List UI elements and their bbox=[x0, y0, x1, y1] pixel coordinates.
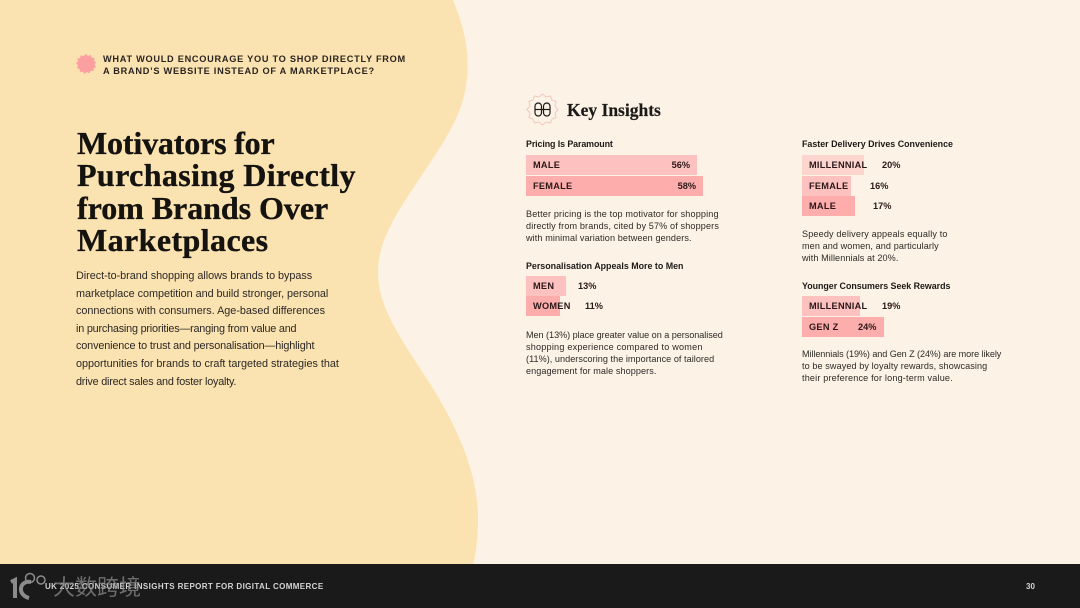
pricing text: Better pricing is the top motivator for shopping bbox=[526, 209, 719, 219]
personalisation text: (11%), underscoring the importance of tailored bbox=[526, 354, 714, 364]
intro paragraph: Direct-to-brand shopping allows brands to bypass bbox=[76, 270, 312, 282]
rewards text: their preference for long-term value. bbox=[802, 373, 953, 383]
title: Purchasing Directly bbox=[77, 157, 356, 193]
title: from Brands Over bbox=[77, 190, 328, 226]
rewards text: Millennials (19%) and Gen Z (24%) are more likely bbox=[802, 349, 1001, 359]
bar: male 56%: MALE bbox=[533, 160, 560, 170]
bar: men 13% bbox=[526, 276, 566, 296]
footer bar bbox=[0, 564, 1080, 608]
intro paragraph: convenience to trust and personalisation—highlight bbox=[76, 340, 314, 352]
bar: female 58%: 58% bbox=[678, 181, 696, 191]
intro paragraph: in purchasing priorities—ranging from value and bbox=[76, 323, 296, 335]
bar: female 16%: FEMALE bbox=[809, 181, 848, 191]
intro paragraph: connections with consumers. Age-based differences bbox=[76, 305, 325, 317]
question kicker: A BRAND’S WEBSITE INSTEAD OF A MARKETPLACE? bbox=[103, 66, 375, 76]
title bbox=[77, 125, 356, 258]
pricing text: with minimal variation between genders. bbox=[526, 233, 692, 243]
bar: male 56%: 56% bbox=[672, 160, 690, 170]
question kicker: WHAT WOULD ENCOURAGE YOU TO SHOP DIRECTLY FROM bbox=[103, 54, 406, 64]
panel: delivery: 16% bbox=[870, 181, 888, 191]
personalisation text: shopping experience compared to women bbox=[526, 342, 703, 352]
bar: millennial 19% bbox=[802, 296, 860, 316]
delivery text bbox=[802, 229, 948, 263]
intro paragraph bbox=[76, 270, 339, 388]
watermark text: 大数跨境 bbox=[53, 575, 141, 600]
bar: gen z 24%: GEN Z bbox=[809, 322, 838, 332]
title: Marketplaces bbox=[77, 222, 269, 258]
panel: pricing bbox=[526, 139, 719, 243]
title: Motivators for bbox=[77, 125, 275, 161]
rewards text bbox=[802, 349, 1002, 383]
bar: female 58% bbox=[526, 176, 703, 196]
panel: rewards: 19% bbox=[882, 301, 900, 311]
bar: male 17% bbox=[802, 196, 855, 216]
delivery text: with Millennials at 20%. bbox=[802, 253, 898, 263]
bar: female 58%: FEMALE bbox=[533, 181, 572, 191]
intro paragraph: opportunities for brands to craft targeted strategies that bbox=[76, 358, 339, 370]
watermark bbox=[10, 572, 141, 600]
watermark logo bbox=[10, 572, 46, 600]
bar: millennial 19%: MILLENNIAL bbox=[809, 301, 867, 311]
question kicker bbox=[103, 54, 406, 76]
heading: pricing is paramount: Pricing Is Paramount bbox=[526, 139, 613, 149]
heading: delivery: Faster Delivery Drives Convenience bbox=[802, 139, 953, 149]
pricing text bbox=[526, 209, 719, 243]
pricing text: directly from brands, cited by 57% of shoppers bbox=[526, 221, 719, 231]
delivery text: men and women, and particularly bbox=[802, 241, 939, 251]
bar: gen z 24%: 24% bbox=[858, 322, 876, 332]
bar: millennial 20% bbox=[802, 155, 864, 175]
rewards text: to be swayed by loyalty rewards, showcasing bbox=[802, 361, 987, 371]
bar: male 56% bbox=[526, 155, 697, 175]
bar: female 16% bbox=[802, 176, 851, 196]
panel: personalisation: 11% bbox=[585, 301, 603, 311]
personalisation text bbox=[526, 330, 723, 376]
bar: women 11%: WOMEN bbox=[533, 301, 571, 311]
heading: personalisation: Personalisation Appeals More to Men bbox=[526, 261, 683, 271]
bar: male 17%: MALE bbox=[809, 201, 836, 211]
personalisation text: engagement for male shoppers. bbox=[526, 366, 656, 376]
intro paragraph: marketplace competition and build stronger, personal bbox=[76, 288, 328, 300]
panel: rewards bbox=[802, 281, 1002, 383]
panel: delivery: 20% bbox=[882, 160, 900, 170]
icon: key insights badge bbox=[526, 94, 558, 126]
delivery text: Speedy delivery appeals equally to bbox=[802, 229, 948, 239]
heading: rewards: Younger Consumers Seek Rewards bbox=[802, 281, 950, 291]
personalisation text: Men (13%) place greater value on a personalised bbox=[526, 330, 723, 340]
footer text: UK 2025 CONSUMER INSIGHTS REPORT FOR DIGITAL COMMERCE bbox=[45, 582, 324, 591]
bar: men 13%: MEN bbox=[533, 281, 554, 291]
bar: gen z 24% bbox=[802, 317, 884, 337]
panel: personalisation bbox=[526, 261, 723, 376]
page number: 30 bbox=[1026, 582, 1035, 591]
panel: personalisation: 13% bbox=[578, 281, 596, 291]
panel: delivery bbox=[802, 139, 953, 263]
icon: pink badge bbox=[76, 54, 96, 74]
bar: millennial 20%: MILLENNIAL bbox=[809, 160, 867, 170]
heading: key insights: Key Insights bbox=[567, 100, 661, 120]
intro paragraph: drive direct sales and foster loyalty. bbox=[76, 376, 236, 388]
bar: women 11% bbox=[526, 296, 560, 316]
panel: delivery: 17% bbox=[873, 201, 891, 211]
